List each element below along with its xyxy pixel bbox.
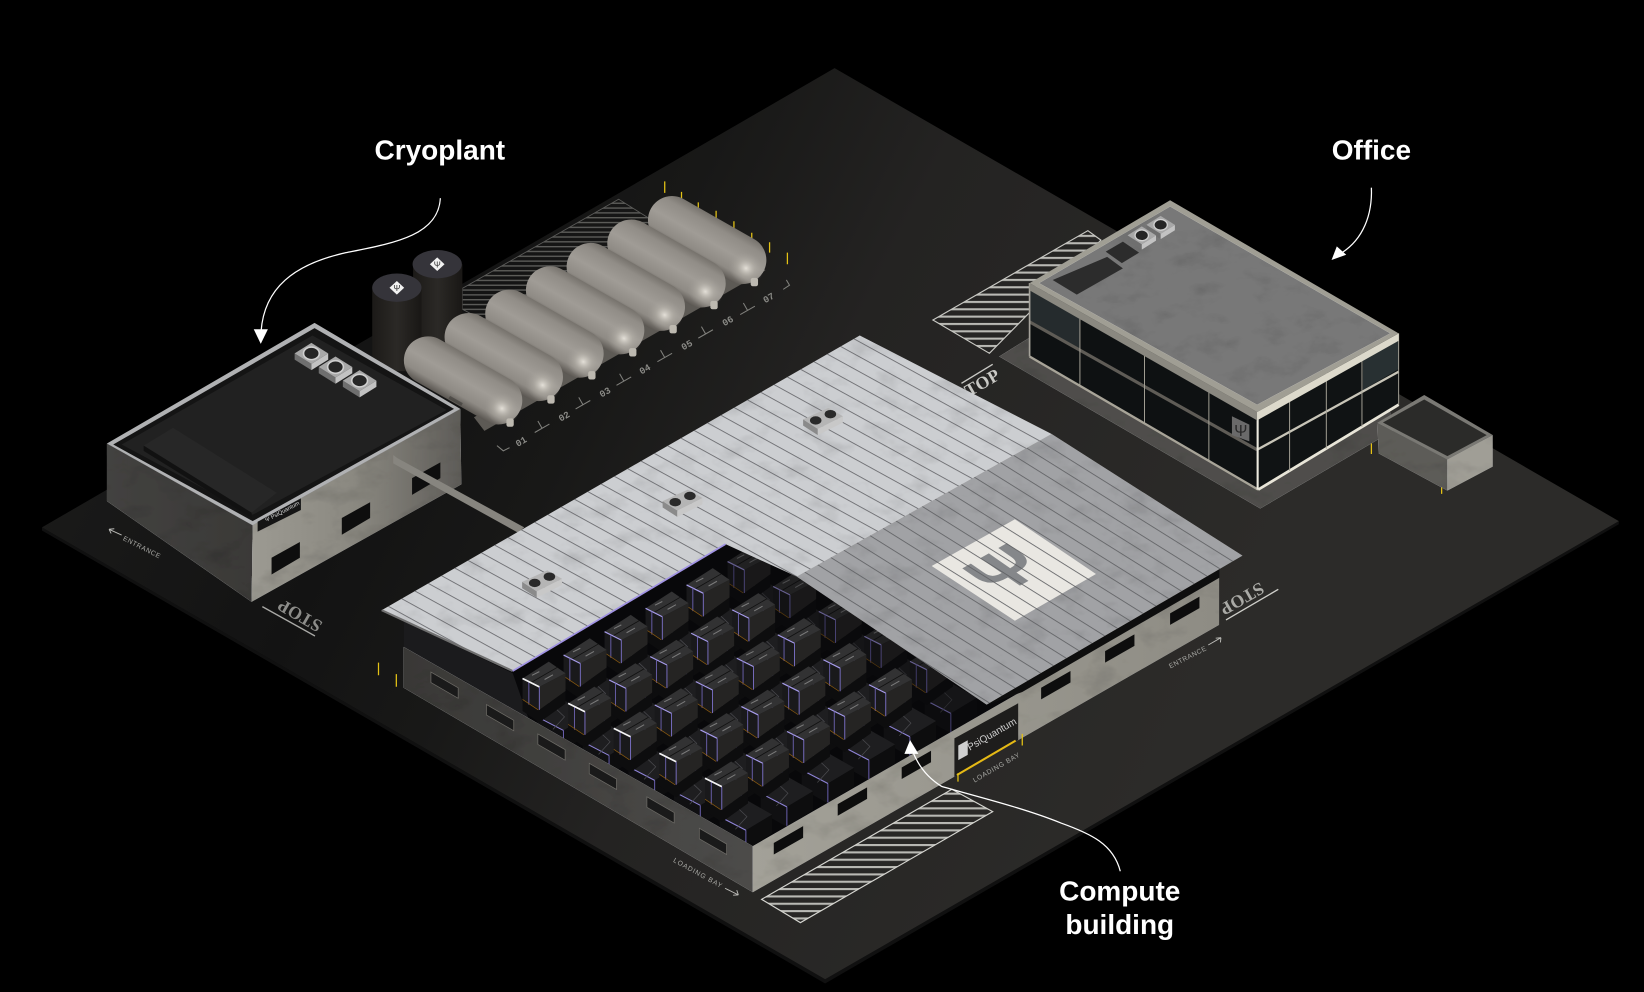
hatched loading bay xyxy=(762,789,993,923)
loading bay marking: left: LOADING BAY xyxy=(672,857,723,890)
roof parapet xyxy=(1030,200,1399,412)
stop marking: right: STOP xyxy=(1216,578,1268,620)
horizontal gas tanks xyxy=(395,187,776,434)
concrete pad xyxy=(999,338,1394,509)
roof dark section xyxy=(797,434,1242,705)
compute building xyxy=(382,336,1242,892)
roof edges xyxy=(382,610,513,671)
window frames xyxy=(1030,283,1399,490)
compute building label: Compute xyxy=(1059,876,1180,907)
interior floor xyxy=(404,544,1022,846)
under-roof left bay xyxy=(404,621,529,721)
cylinder 2: Ψ xyxy=(434,259,441,269)
rooftop cooling units xyxy=(295,343,376,397)
tank bay numbers: 06 xyxy=(720,314,736,329)
wall windows xyxy=(272,462,440,575)
concrete enclosure xyxy=(1377,395,1493,491)
hatched bay behind tanks xyxy=(462,199,655,325)
compute building label: building xyxy=(1065,909,1174,940)
roof light section xyxy=(382,336,1052,671)
left wall windows xyxy=(431,672,727,854)
right wall xyxy=(753,578,1219,892)
roof parapet xyxy=(107,323,460,525)
PsiQuantum sign: Ψ PsiQuantum xyxy=(264,501,301,524)
tank bay numbers: 02 xyxy=(557,409,572,424)
left wall xyxy=(404,647,753,892)
tank bay numbers: 05 xyxy=(679,338,695,353)
office building xyxy=(999,200,1399,509)
PsiQuantum loading bay sign xyxy=(954,703,1022,782)
office wall logo: Ψ xyxy=(1234,423,1247,440)
tank bay numbers: 03 xyxy=(598,385,613,400)
PsiQuantum sign xyxy=(258,498,301,532)
entrance marking: cryoplant: ENTRANCE xyxy=(122,535,162,560)
PsiQuantum loading bay sign: PsiQuantum xyxy=(966,716,1019,753)
entrance marking: cryoplant xyxy=(109,529,162,560)
tank bay numbers: 07 xyxy=(761,291,777,306)
roof vents xyxy=(522,408,843,598)
vertical storage cylinders xyxy=(372,250,462,371)
quantum compute modules xyxy=(523,545,977,850)
arrow: compute building xyxy=(904,740,1120,871)
entrance marking: compute xyxy=(1168,638,1221,670)
yellow tick marks xyxy=(379,181,1442,687)
office wall logo xyxy=(1232,416,1249,441)
under-roof shadow band xyxy=(987,569,1219,705)
loading bay marking: left xyxy=(672,857,738,895)
right wall xyxy=(252,409,461,602)
roof seams xyxy=(382,336,1052,671)
entrance marking: compute: ENTRANCE xyxy=(1168,645,1208,670)
connecting pipe xyxy=(393,455,524,533)
roof logo: Ψ xyxy=(948,533,1062,607)
roof rim lower faces xyxy=(1030,283,1257,420)
cryoplant building xyxy=(107,323,461,602)
office cooling units xyxy=(1128,216,1175,250)
tank bay numbers xyxy=(497,280,789,451)
cylinder 1: Ψ xyxy=(393,283,400,293)
roof logo xyxy=(932,519,1096,621)
tank bay numbers: 01 xyxy=(514,434,529,450)
tank saddle pad xyxy=(474,260,765,431)
loading bay marking: right: LOADING BAY xyxy=(972,752,1021,784)
tank bay numbers: 04 xyxy=(637,362,653,377)
left glass face xyxy=(1030,283,1258,490)
left wall xyxy=(107,443,253,602)
cryoplant label: Cryoplant xyxy=(375,134,505,165)
compute building label xyxy=(1059,876,1180,940)
stop marking: cryoplant: STOP xyxy=(274,595,325,636)
arrow: office xyxy=(1332,188,1371,260)
roof surface xyxy=(113,328,454,521)
office label: Office xyxy=(1332,134,1411,165)
arrow: cryoplant xyxy=(254,198,440,344)
stop marking: middle: STOP xyxy=(952,365,1004,406)
rooftop block xyxy=(144,428,277,513)
concrete roof xyxy=(1039,207,1390,405)
right wall windows xyxy=(774,597,1199,854)
right glass face xyxy=(1257,333,1399,490)
hatched bay near office xyxy=(933,231,1101,353)
rooftop dark pads xyxy=(1053,242,1139,295)
